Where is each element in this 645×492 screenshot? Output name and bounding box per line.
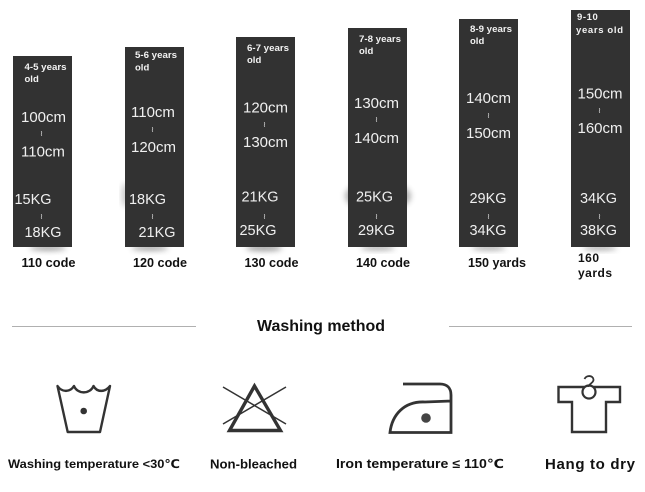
size column: 140 code: old (359, 46, 373, 57)
size column: 140 code: ≀ (375, 115, 378, 124)
icon: shirt on hanger (558, 376, 620, 432)
size column: 140 code: 29KG (358, 222, 395, 239)
size column: 140 code: 140cm (354, 130, 399, 147)
size column: 110 code: 18KG (24, 224, 62, 241)
size column: 130 code (236, 37, 298, 270)
size column: 160 yards: yards (578, 266, 613, 280)
care item: non-bleached (210, 386, 297, 472)
size column: 130 code: 6-7 years (247, 43, 289, 54)
size column: 160 yards: 150cm (578, 86, 623, 103)
size column: 120 code: 18KG (129, 191, 166, 208)
size column: 110 code (13, 56, 76, 270)
size column: 140 code: ≀ (375, 212, 378, 221)
care item: hang to dry (545, 376, 636, 473)
care item: washing temperature: Washing temperature <30℃ (8, 457, 180, 471)
size column: 160 yards: 38KG (580, 222, 617, 239)
size column: 140 code: 7-8 years (359, 34, 401, 45)
size column: 150 yards (459, 19, 526, 270)
size column: 160 yards: ≀ (598, 212, 601, 221)
size column: 160 yards: 160cm (578, 120, 623, 137)
size column: 110 code: old (24, 74, 39, 85)
size column: 150 yards: ≀ (487, 111, 490, 120)
size column: 160 yards: ≀ (598, 106, 601, 115)
size column: 150 yards: 34KG (470, 222, 506, 239)
size column: 120 code: ≀ (151, 212, 154, 221)
size column: 120 code (122, 47, 187, 270)
size column: 150 yards: ≀ (487, 212, 490, 221)
care item: hang to dry: Hang to dry (545, 456, 636, 473)
size column: 150 yards: old (470, 36, 484, 47)
size column: 120 code: 110cm (131, 104, 175, 121)
size column: 130 code: ≀ (263, 120, 266, 129)
size column: 110 code: ≀ (40, 212, 43, 221)
size column: 110 code: ≀ (40, 129, 43, 138)
icon: iron (390, 384, 451, 432)
care item: non-bleached: Non-bleached (210, 456, 297, 472)
size column: 160 yards: 34KG (580, 190, 617, 207)
size column: 120 code: old (135, 62, 149, 74)
size column: 120 code: ≀ (151, 125, 154, 134)
size column: 150 yards: 140cm (466, 90, 511, 107)
icon: wash tub (58, 386, 110, 432)
size column: 110 code: 110 code (22, 255, 76, 270)
size column: 130 code: 130cm (243, 134, 288, 151)
size column: 120 code: 120 code (133, 255, 187, 270)
size column: 130 code: 130 code (244, 255, 298, 270)
size column: 160 yards: 9-10 (577, 12, 598, 23)
size column: 120 code: 120cm (131, 139, 176, 156)
size column: 110 code: 15KG (14, 191, 52, 208)
size column: 160 yards: years old (576, 25, 623, 36)
size column: 110 code: 110cm (21, 144, 65, 160)
size column: 160 yards (571, 10, 630, 280)
size column: 150 yards: 29KG (470, 190, 506, 207)
icon: crossed triangle (223, 386, 286, 430)
size column: 150 yards: 150 yards (468, 255, 526, 270)
heading: washing method: Washing method (257, 318, 385, 335)
care item: iron temperature: Iron temperature ≤ 110℃ (336, 457, 504, 471)
size column: 130 code: old (247, 55, 261, 66)
size column: 140 code: 25KG (356, 189, 393, 206)
size column: 140 code: 130cm (354, 95, 399, 112)
size column: 130 code: 21KG (242, 189, 278, 206)
size column: 110 code: 4-5 years (24, 62, 66, 73)
size column: 120 code: 5-6 years (135, 50, 177, 61)
size column: 130 code: 25KG (240, 222, 276, 239)
size column: 150 yards: 8-9 years (470, 24, 512, 35)
size column: 140 code (345, 28, 411, 270)
size column: 140 code: 140 code (356, 255, 410, 270)
size column: 150 yards: 150cm (466, 125, 511, 142)
size column: 130 code: ≀ (263, 212, 266, 221)
size column: 160 yards: 160 (578, 251, 600, 265)
size column: 110 code: 100cm (21, 109, 66, 126)
size column: 130 code: 120cm (243, 100, 288, 117)
size column: 120 code: 21KG (138, 224, 176, 241)
care item: washing temperature (8, 386, 180, 471)
care item: iron temperature (336, 384, 504, 471)
